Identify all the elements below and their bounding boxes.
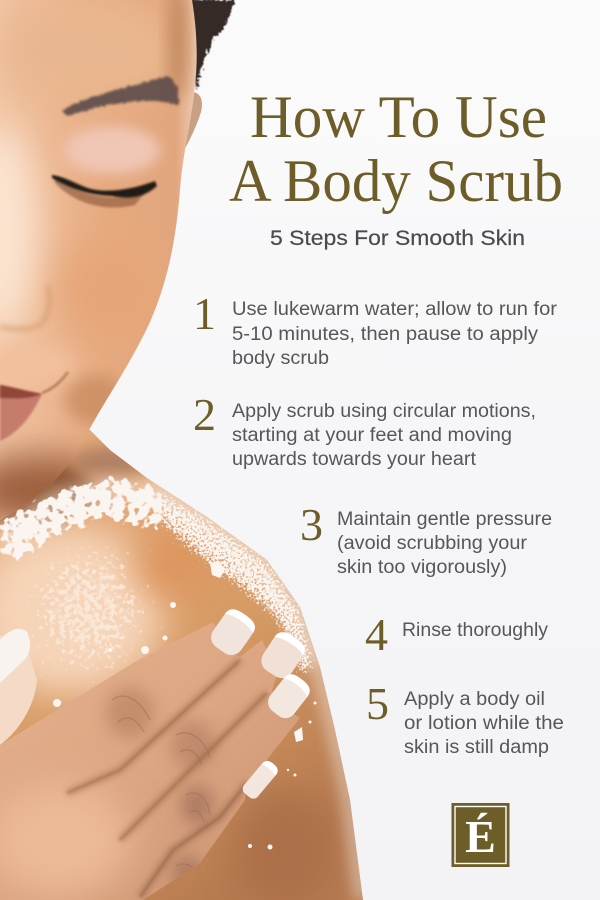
photo: woman applying scrub [0,0,370,900]
eyelid [64,126,160,174]
step 1 text [232,299,558,369]
title: A Body Scrub [229,148,563,214]
nail: index [206,605,259,660]
step 3 text [337,509,552,578]
step 3 text: (avoid scrubbing your [337,533,528,554]
step 2 text: starting at your feet and moving [232,425,512,446]
mouth crease [42,372,68,393]
number 4: 4 [365,609,388,660]
step 4 [365,609,549,660]
ear [182,92,202,152]
nail: ring [264,670,314,723]
number 3: 3 [300,499,323,550]
left finger [0,629,37,745]
knuckle wrinkles [112,696,210,868]
finger shading [67,660,240,793]
step 5 text: skin is still damp [404,737,549,758]
number 2: 2 [193,389,216,440]
eye lashes [52,175,157,198]
finger creases [67,660,240,793]
step 3 text: Maintain gentle pressure [337,509,552,530]
lips [0,385,42,441]
neck and shoulder [0,420,370,900]
step 5 [366,678,564,758]
title [229,84,563,214]
nail: left finger [0,629,30,683]
step 5 text [404,689,564,758]
step 1 text: body scrub [232,348,329,369]
salt: fine grains [150,484,316,680]
salt crystals [53,561,316,850]
eyebrow [62,76,179,116]
step 2 [193,389,536,470]
step 2 text: upwards towards your heart [232,449,477,470]
salt: coarse crystals [0,476,170,560]
step 3 text: skin too vigorously) [337,557,507,578]
logo [452,803,510,867]
hair [190,0,234,90]
step 3 [300,499,552,578]
nose shadow [0,285,50,329]
step 5 text: or lotion while the [404,713,564,734]
number 5: 5 [366,678,389,729]
step 2 text [232,401,536,470]
step 1 text: Use lukewarm water; allow to run for [232,299,558,320]
step 1 text: 5-10 minutes, then pause to apply [232,324,539,345]
face [0,0,200,530]
logo: É [465,811,496,862]
title: How To Use [250,84,547,150]
step 5 text: Apply a body oil [404,689,545,710]
eye shadow crease [55,178,145,207]
salt: pale mottled area [33,550,143,670]
nail: pinky [240,758,280,801]
hand [0,622,300,900]
number 1: 1 [193,288,216,339]
step 4 text: Rinse thoroughly [402,620,549,641]
step 2 text: Apply scrub using circular motions, [232,401,536,422]
step 1 [193,288,558,369]
subtitle: 5 Steps For Smooth Skin [270,227,525,250]
nail: middle [257,628,309,683]
